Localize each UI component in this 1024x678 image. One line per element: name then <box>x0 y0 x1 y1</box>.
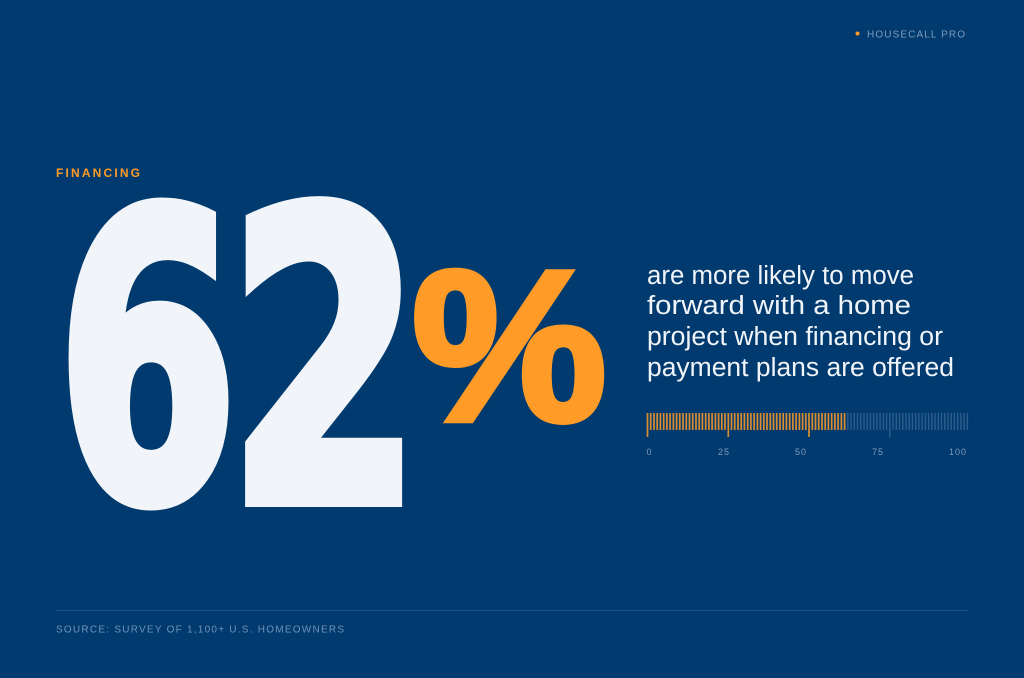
tick scale chart <box>646 413 967 457</box>
footer divider <box>56 610 968 611</box>
scale labels <box>646 447 967 457</box>
big statistic 62%: 6 <box>57 130 238 591</box>
unfilled ticks <box>848 413 967 437</box>
big statistic 62%: 2 <box>228 130 421 595</box>
description text: are more likely to move <box>647 262 914 290</box>
description text <box>647 262 954 382</box>
description text: payment plans are offered <box>647 354 954 382</box>
category label: FINANCING <box>56 166 140 180</box>
brand tag: HOUSECALL PRO <box>867 30 965 40</box>
scale labels: 50 <box>795 447 807 457</box>
scale labels: 75 <box>872 447 884 457</box>
filled ticks: 62 of 100 <box>648 413 845 437</box>
scale labels: 100 <box>949 447 967 457</box>
big statistic 62% <box>57 130 607 595</box>
big statistic 62%: % <box>412 226 607 466</box>
description text: project when financing or <box>647 323 944 351</box>
scale labels: 25 <box>718 447 730 457</box>
scale labels: 0 <box>646 447 653 457</box>
description text: forward with a home <box>647 292 911 320</box>
source note: SOURCE: SURVEY OF 1,100+ U.S. HOMEOWNERS <box>56 624 344 636</box>
